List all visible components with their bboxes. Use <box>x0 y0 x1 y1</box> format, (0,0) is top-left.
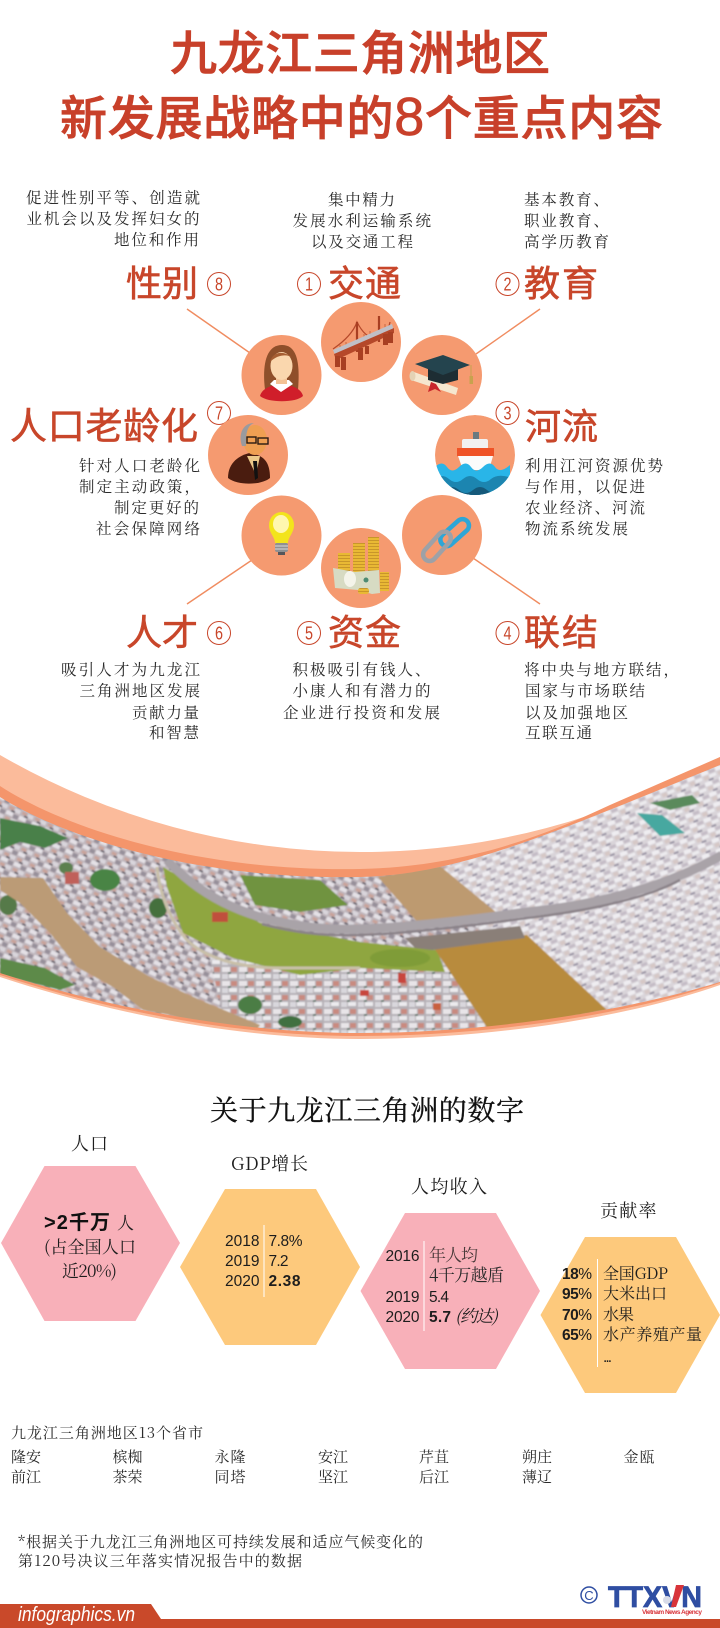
provinces list: 槟椥 <box>112 1446 142 1467</box>
item 4: connectivity: 将中央与地方联结， <box>524 658 679 680</box>
provinces list: 安江 <box>318 1446 348 1467</box>
hexagon: income per capita: 人均收入 <box>411 1173 487 1199</box>
icon: chain link <box>402 495 482 575</box>
item 1: transport: 1 <box>305 274 313 294</box>
hexagon: income per capita: 2016 <box>386 1248 420 1265</box>
hexagon: income per capita: 5.7 <box>429 1309 451 1326</box>
item 5: capital: 资金 <box>328 612 401 653</box>
hexagon: contribution rate: 水产养殖产量 <box>603 1322 702 1345</box>
item 8: gender <box>26 186 230 304</box>
item 6: talent: 人才 <box>126 612 198 653</box>
hexagon: contribution rate: 贡献率 <box>600 1197 656 1223</box>
provinces list: 朔庄 <box>522 1446 552 1467</box>
item 8: gender: 促进性别平等、创造就 <box>26 186 200 208</box>
item 6: talent: 贡献力量 <box>132 701 199 723</box>
item 3: rivers: 与作用，以促进 <box>525 475 645 497</box>
provinces list: 永隆 <box>214 1446 246 1467</box>
item 6: talent <box>61 612 230 743</box>
item 4: connectivity: 国家与市场联结 <box>525 679 645 701</box>
photo band: aerial view of the delta <box>0 735 720 1045</box>
hexagon: GDP growth: 2020 <box>225 1273 260 1290</box>
item 7: aging: 针对人口老龄化 <box>79 454 200 476</box>
item 4: connectivity: 以及加强地区 <box>525 701 628 723</box>
title <box>60 27 663 147</box>
hexagon: income per capita: 4千万越盾 <box>429 1261 504 1286</box>
hexagon: income per capita: (约达) <box>455 1302 499 1327</box>
item 7: aging: 社会保障网络 <box>96 517 200 539</box>
hexagon: contribution rate <box>540 1197 720 1393</box>
hexagon: income per capita <box>360 1173 540 1369</box>
section heading: 关于九龙江三角洲的数字 <box>210 1089 524 1129</box>
item 2: education: 2 <box>504 274 512 294</box>
hexagon: GDP growth: 2018 <box>225 1233 260 1250</box>
provinces list <box>11 1422 654 1487</box>
item 6: talent: 吸引人才为九龙江 <box>61 658 200 680</box>
logo: TTXVN: C <box>584 1588 594 1603</box>
icon: bridge <box>321 302 401 382</box>
hexagon: contribution rate: 全国GDP <box>603 1261 668 1284</box>
item 2: education: 职业教育、 <box>524 209 609 231</box>
icon: graduation cap <box>402 335 482 415</box>
provinces list: 金瓯 <box>624 1446 654 1467</box>
logo: TTXVN: TTXVN <box>608 1581 702 1614</box>
icon: money and coins <box>321 528 401 608</box>
item 1: transport: 以及交通工程 <box>311 230 413 252</box>
item 4: connectivity: 互联互通 <box>525 721 592 743</box>
hexagon: GDP growth: GDP增长 <box>231 1150 308 1176</box>
item 8: gender: 地位和作用 <box>114 228 199 250</box>
title: 九龙江三角洲地区 <box>170 27 550 80</box>
hexagon: income per capita: 2019 <box>386 1289 420 1306</box>
icon: woman <box>242 335 322 415</box>
item 3: rivers: 3 <box>504 404 512 424</box>
hexagon: GDP growth: 2019 <box>225 1253 260 1270</box>
provinces list: 前江 <box>11 1466 41 1487</box>
item 6: talent: 三角洲地区发展 <box>80 679 200 701</box>
item 1: transport: 发展水利运输系统 <box>292 209 431 231</box>
item 3: rivers: 农业经济、河流 <box>525 496 645 518</box>
item 4: connectivity <box>496 612 679 743</box>
item 4: connectivity: 4 <box>504 624 512 644</box>
hexagon: contribution rate: 70% <box>562 1307 592 1324</box>
footnote <box>18 1531 423 1571</box>
item 6: talent: 6 <box>215 624 223 644</box>
footer bar: infographics.vn <box>18 1604 135 1626</box>
hexagon: population <box>1 1130 180 1321</box>
provinces list: 后江 <box>419 1466 449 1487</box>
hexagon: GDP growth: 7.2 <box>268 1253 288 1270</box>
item 7: aging: 制定更好的 <box>114 496 199 518</box>
item 7: aging: 7 <box>215 404 223 424</box>
item 3: rivers: 利用江河资源优势 <box>525 454 663 476</box>
hexagon: income per capita: 年人均 <box>429 1241 478 1266</box>
hexagon: GDP growth: 2.38 <box>268 1273 301 1290</box>
item 5: capital: 企业进行投资和发展 <box>283 701 440 723</box>
hexagon: income per capita: 2020 <box>386 1309 420 1326</box>
hexagon: contribution rate: 95% <box>562 1286 592 1303</box>
hexagon: income per capita: 5.4 <box>429 1289 449 1306</box>
hexagon: GDP growth: 7.8% <box>268 1233 303 1250</box>
icon: light bulb <box>242 496 322 576</box>
icon: ship on waves <box>435 415 515 500</box>
item 2: education: 基本教育、 <box>524 188 609 210</box>
item 7: aging: 制定主动政策， <box>79 475 200 497</box>
item 3: rivers: 物流系统发展 <box>525 517 628 539</box>
hexagon: GDP growth <box>180 1150 360 1345</box>
item 8: gender: 性别 <box>126 263 198 304</box>
item 2: education <box>496 188 609 304</box>
provinces list: 薄辽 <box>522 1466 552 1487</box>
item 7: aging: 人口老龄化 <box>10 406 198 447</box>
item 1: transport <box>292 188 431 304</box>
hexagon: population: >2千万 <box>44 1211 110 1234</box>
hexagon: contribution rate: 水果 <box>603 1302 634 1325</box>
hexagon: population: (占全国人口 <box>44 1233 136 1258</box>
hexagon: population: 人 <box>117 1209 134 1234</box>
item 3: rivers <box>496 402 663 539</box>
footer bar <box>0 1604 720 1628</box>
item 5: capital: 小康人和有潜力的 <box>292 679 430 701</box>
item 4: connectivity: 联结 <box>524 612 598 653</box>
item 7: aging <box>10 402 230 539</box>
item 5: capital: 5 <box>305 624 313 644</box>
item 2: education: 高学历教育 <box>524 230 609 252</box>
item 8: gender: 8 <box>215 274 223 294</box>
title: 新发展战略中的8个重点内容 <box>60 87 663 147</box>
connector lines <box>187 309 540 604</box>
item 2: education: 教育 <box>524 263 598 304</box>
provinces list: 茶荣 <box>112 1466 142 1487</box>
provinces list: 坚江 <box>318 1466 348 1487</box>
hexagon: population: 近20%) <box>62 1257 117 1282</box>
footnote: 第120号决议三年落实情况报告中的数据 <box>18 1550 302 1571</box>
hexagon: contribution rate: 18% <box>562 1266 592 1283</box>
logo: TTXVN: Vietnam News Agency <box>642 1609 702 1616</box>
item 8: gender: 业机会以及发挥妇女的 <box>26 207 200 229</box>
footnote: *根据关于九龙江三角洲地区可持续发展和适应气候变化的 <box>18 1531 423 1552</box>
hexagon: contribution rate: ... <box>603 1349 612 1366</box>
provinces list: 隆安 <box>11 1446 41 1467</box>
item 3: rivers: 河流 <box>525 406 598 447</box>
icon: old man <box>208 415 288 495</box>
hexagon: contribution rate: 大米出口 <box>603 1281 667 1304</box>
item 6: talent: 和智慧 <box>149 721 199 743</box>
hexagon: population: 人口 <box>71 1130 108 1156</box>
provinces list: 九龙江三角洲地区13个省市 <box>11 1422 203 1443</box>
item 1: transport: 交通 <box>328 263 401 304</box>
item 1: transport: 集中精力 <box>328 188 395 210</box>
hexagon: contribution rate: 65% <box>562 1327 592 1344</box>
provinces list: 同塔 <box>214 1466 246 1487</box>
provinces list: 芹苴 <box>419 1446 449 1467</box>
item 5: capital: 积极吸引有钱人、 <box>292 658 430 680</box>
item 5: capital <box>283 612 440 723</box>
